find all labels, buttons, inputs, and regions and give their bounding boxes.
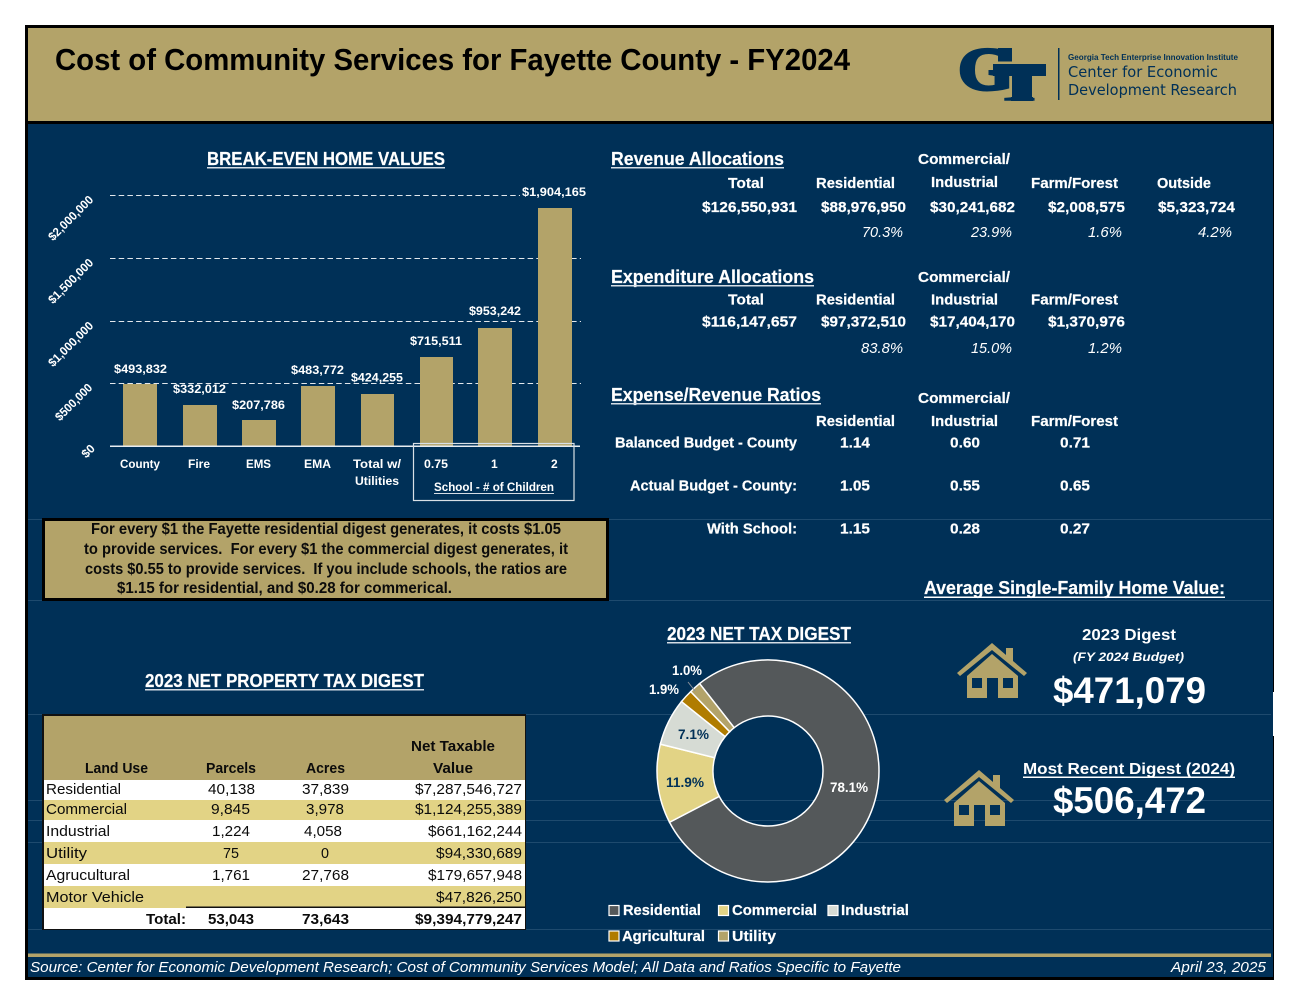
table body rows: 1,761 — [212, 868, 250, 884]
panel: expenditure allocations: Commercial/ — [918, 270, 1010, 286]
panel: expenditure allocations: Farm/Forest — [1031, 292, 1118, 308]
panel: expenditure allocations: Residential — [816, 292, 895, 308]
footer: source and date: Source: Center for Economic Development Research; Cost of Community Services Model; All Data and Ratios Specific to Fayette — [30, 960, 901, 976]
table total row: 73,643 — [302, 912, 349, 928]
donut labels: 7.1% — [678, 727, 709, 742]
category labels: EMA — [304, 457, 331, 471]
table total row: $9,394,779,247 — [415, 912, 522, 928]
panel: revenue allocations — [611, 148, 1235, 241]
logo text: Center for Economic — [1068, 63, 1218, 81]
panel: expense/revenue ratios: Industrial — [931, 414, 998, 430]
table body rows: Industrial — [46, 824, 110, 840]
table body rows: 9,845 — [211, 802, 250, 818]
table total row: Total: — [146, 912, 186, 928]
panel: expenditure allocations: $17,404,170 — [930, 314, 1015, 330]
slice: agricultural 1.9% — [681, 692, 730, 737]
panel: expenditure allocations: 1.2% — [1088, 341, 1122, 357]
bar value labels: $207,786 — [232, 398, 285, 412]
callout: ratio summary: costs $0.55 to provide services. If you include schools, the ratios are — [85, 561, 567, 578]
panel: expense/revenue ratios: 0.27 — [1060, 522, 1090, 538]
block: most recent digest value: $506,472 — [1053, 780, 1206, 821]
block: 2023 digest value: $471,079 — [1053, 670, 1206, 711]
donut labels: 1.0% — [672, 663, 702, 678]
table: net property tax digest — [42, 714, 526, 930]
y axis labels: $1,500,000 — [45, 255, 96, 307]
table total row: 53,043 — [208, 912, 254, 928]
footer: source and date — [28, 954, 1271, 976]
block: 2023 digest value: (FY 2024 Budget) — [1073, 650, 1184, 664]
bar value labels: $953,242 — [469, 304, 521, 318]
table body rows: Agrucultural — [46, 868, 130, 884]
panel: expense/revenue ratios: 1.14 — [840, 436, 870, 452]
panel: expense/revenue ratios: Commercial/ — [918, 391, 1010, 407]
panel: expenditure allocations — [611, 266, 1125, 357]
panel: expense/revenue ratios: 0.60 — [950, 436, 980, 452]
panel: expenditure allocations: $116,147,657 — [702, 314, 797, 330]
callout: ratio summary: For every $1 the Fayette residential digest generates, it costs $1.05 — [91, 521, 561, 538]
callout: ratio summary: to provide services. For every $1 the commercial digest generates, it — [84, 541, 568, 558]
table body rows: 1,224 — [212, 824, 250, 840]
y axis labels: $1,000,000 — [45, 318, 96, 370]
title: Cost of Community Services for Fayette County - FY2024 — [55, 42, 851, 77]
panel: expense/revenue ratios: Expense/Revenue Ratios — [611, 384, 821, 405]
legend: donut chart: Industrial — [841, 903, 909, 919]
logo: GT — [958, 36, 1046, 112]
category labels: 1 — [491, 457, 498, 471]
panel: revenue allocations: Outside — [1157, 176, 1211, 192]
panel: revenue allocations: 23.9% — [970, 225, 1012, 241]
panel: revenue allocations: 1.6% — [1088, 225, 1122, 241]
panel: revenue allocations: $30,241,682 — [930, 200, 1015, 216]
category labels: County — [120, 457, 160, 471]
category labels: School - # of Children — [434, 480, 554, 494]
y axis labels: $500,000 — [52, 380, 95, 424]
table body rows: $661,162,244 — [428, 824, 522, 840]
icon: house 2023 — [957, 643, 1027, 698]
block: most recent digest value: Most Recent Digest (2024) — [1023, 761, 1235, 778]
panel: expenditure allocations: Industrial — [931, 292, 998, 308]
table header row: Parcels — [206, 761, 256, 777]
panel: expenditure allocations: 15.0% — [971, 341, 1012, 357]
table body rows: $94,330,689 — [436, 846, 522, 862]
panel: expense/revenue ratios: 0.55 — [950, 478, 980, 494]
panel: revenue allocations: Revenue Allocations — [611, 148, 784, 169]
panel: revenue allocations: Total — [728, 176, 764, 192]
panel: revenue allocations: Farm/Forest — [1031, 176, 1118, 192]
block: 2023 digest value — [1053, 627, 1206, 711]
block: most recent digest value — [1023, 761, 1235, 821]
panel: expense/revenue ratios — [611, 384, 1118, 538]
table body rows: 37,839 — [302, 782, 349, 798]
donut labels: 1.9% — [649, 682, 679, 697]
panel: expenditure allocations: Total — [728, 292, 764, 308]
heading: break-even home values: BREAK-EVEN HOME VALUES — [207, 148, 445, 169]
bar value labels: $715,511 — [410, 334, 462, 348]
panel: revenue allocations: 70.3% — [862, 225, 903, 241]
logo text — [1068, 53, 1239, 99]
table body rows: $47,826,250 — [436, 890, 522, 906]
panel: revenue allocations: Residential — [816, 176, 895, 192]
callout: ratio summary: $1.15 for residential, and $0.28 for commerical. — [117, 580, 452, 597]
table body rows: 3,978 — [306, 802, 344, 818]
donut labels — [649, 663, 868, 795]
header band — [28, 28, 1271, 121]
logo: GT: G — [958, 36, 1014, 102]
donut chart: net tax digest — [649, 660, 879, 882]
logo text: Georgia Tech Enterprise Innovation Institute — [1068, 53, 1239, 62]
bar value labels — [114, 185, 586, 412]
legend: donut chart: Utility — [732, 929, 776, 945]
panel: revenue allocations: $126,550,931 — [702, 200, 797, 216]
bar value labels: $493,832 — [114, 362, 167, 376]
table body rows: 0 — [321, 846, 329, 862]
table header row: Value — [433, 761, 473, 777]
table header row: Land Use — [85, 761, 148, 777]
table body rows: Utility — [46, 846, 88, 862]
panel: expense/revenue ratios: 0.28 — [950, 522, 980, 538]
slice: utility 1.0% — [691, 684, 734, 732]
logo text: Development Research — [1068, 81, 1237, 99]
bar value labels: $483,772 — [291, 363, 344, 377]
y axis labels — [45, 192, 98, 461]
bar value labels: $424,255 — [351, 370, 403, 384]
category labels: Utilities — [355, 474, 399, 488]
panel: revenue allocations: $88,976,950 — [821, 200, 906, 216]
category labels: EMS — [246, 457, 271, 471]
category labels: 2 — [551, 457, 558, 471]
panel: expenditure allocations: Expenditure Allocations — [611, 266, 814, 287]
legend: donut chart: Residential — [623, 903, 701, 919]
panel: expense/revenue ratios: 1.05 — [840, 478, 870, 494]
bars — [123, 208, 572, 446]
category labels: Fire — [188, 457, 210, 471]
table header row: Acres — [306, 761, 345, 777]
table body rows: $1,124,255,389 — [415, 802, 522, 818]
panel: revenue allocations: $5,323,724 — [1158, 200, 1235, 216]
table body rows: Motor Vehicle — [46, 890, 144, 906]
slice: residential 78.1% — [670, 660, 879, 882]
panel: expenditure allocations: 83.8% — [861, 341, 903, 357]
bar chart: break-even home values — [45, 185, 586, 500]
legend: donut chart — [609, 903, 909, 945]
table body rows: $7,287,546,727 — [415, 782, 522, 798]
callout: ratio summary — [44, 520, 608, 600]
table body rows: Commercial — [46, 802, 127, 818]
footer: source and date: April 23, 2025 — [1170, 960, 1267, 976]
y axis labels: $0 — [78, 441, 98, 461]
heading: 2023 net tax digest: 2023 NET TAX DIGEST — [667, 623, 852, 644]
bar value labels: $332,012 — [173, 382, 226, 396]
table body rows: Residential — [46, 782, 121, 798]
panel: expenditure allocations: $1,370,976 — [1048, 314, 1125, 330]
table body rows — [46, 782, 522, 906]
table body rows: 27,768 — [302, 868, 349, 884]
panel: expense/revenue ratios: Residential — [816, 414, 895, 430]
table header row: Net Taxable — [411, 739, 495, 755]
category labels — [120, 457, 558, 494]
panel: expense/revenue ratios: Actual Budget - County: — [630, 478, 797, 494]
legend: donut chart: Agricultural — [622, 929, 705, 945]
table body rows: $179,657,948 — [428, 868, 522, 884]
panel: expense/revenue ratios: 1.15 — [840, 522, 870, 538]
heading: 2023 net property tax digest: 2023 NET PROPERTY TAX DIGEST — [145, 670, 425, 691]
logo: GT: T — [993, 52, 1046, 112]
category labels: 0.75 — [424, 457, 448, 471]
panel: expense/revenue ratios: 0.65 — [1060, 478, 1090, 494]
category labels: Total w/ — [353, 457, 402, 471]
legend: donut chart: Commercial — [732, 903, 817, 919]
panel: revenue allocations: $2,008,575 — [1048, 200, 1125, 216]
panel: revenue allocations: Commercial/ — [918, 152, 1010, 168]
table header row — [85, 739, 495, 777]
panel: revenue allocations: 4.2% — [1198, 225, 1232, 241]
panel: expense/revenue ratios: Balanced Budget - County — [615, 436, 797, 452]
bar value labels: $1,904,165 — [522, 185, 586, 199]
panel: expense/revenue ratios: Farm/Forest — [1031, 414, 1118, 430]
table total row — [146, 912, 522, 928]
table body rows: 75 — [223, 846, 239, 862]
panel: expense/revenue ratios: With School: — [707, 522, 797, 538]
y axis labels: $2,000,000 — [45, 192, 96, 244]
donut labels: 78.1% — [830, 780, 868, 795]
donut labels: 11.9% — [666, 775, 704, 790]
panel: expenditure allocations: $97,372,510 — [821, 314, 906, 330]
slice: industrial 7.1% — [660, 702, 725, 758]
block: 2023 digest value: 2023 Digest — [1082, 627, 1177, 644]
panel: revenue allocations: Industrial — [931, 175, 998, 191]
table body rows: 40,138 — [208, 782, 255, 798]
icon: house 2024 — [944, 770, 1014, 826]
heading: average single-family home value: Average Single-Family Home Value: — [924, 577, 1225, 598]
panel: expense/revenue ratios: 0.71 — [1060, 436, 1090, 452]
slice: commercial 11.9% — [657, 744, 719, 822]
table body rows: 4,058 — [304, 824, 342, 840]
